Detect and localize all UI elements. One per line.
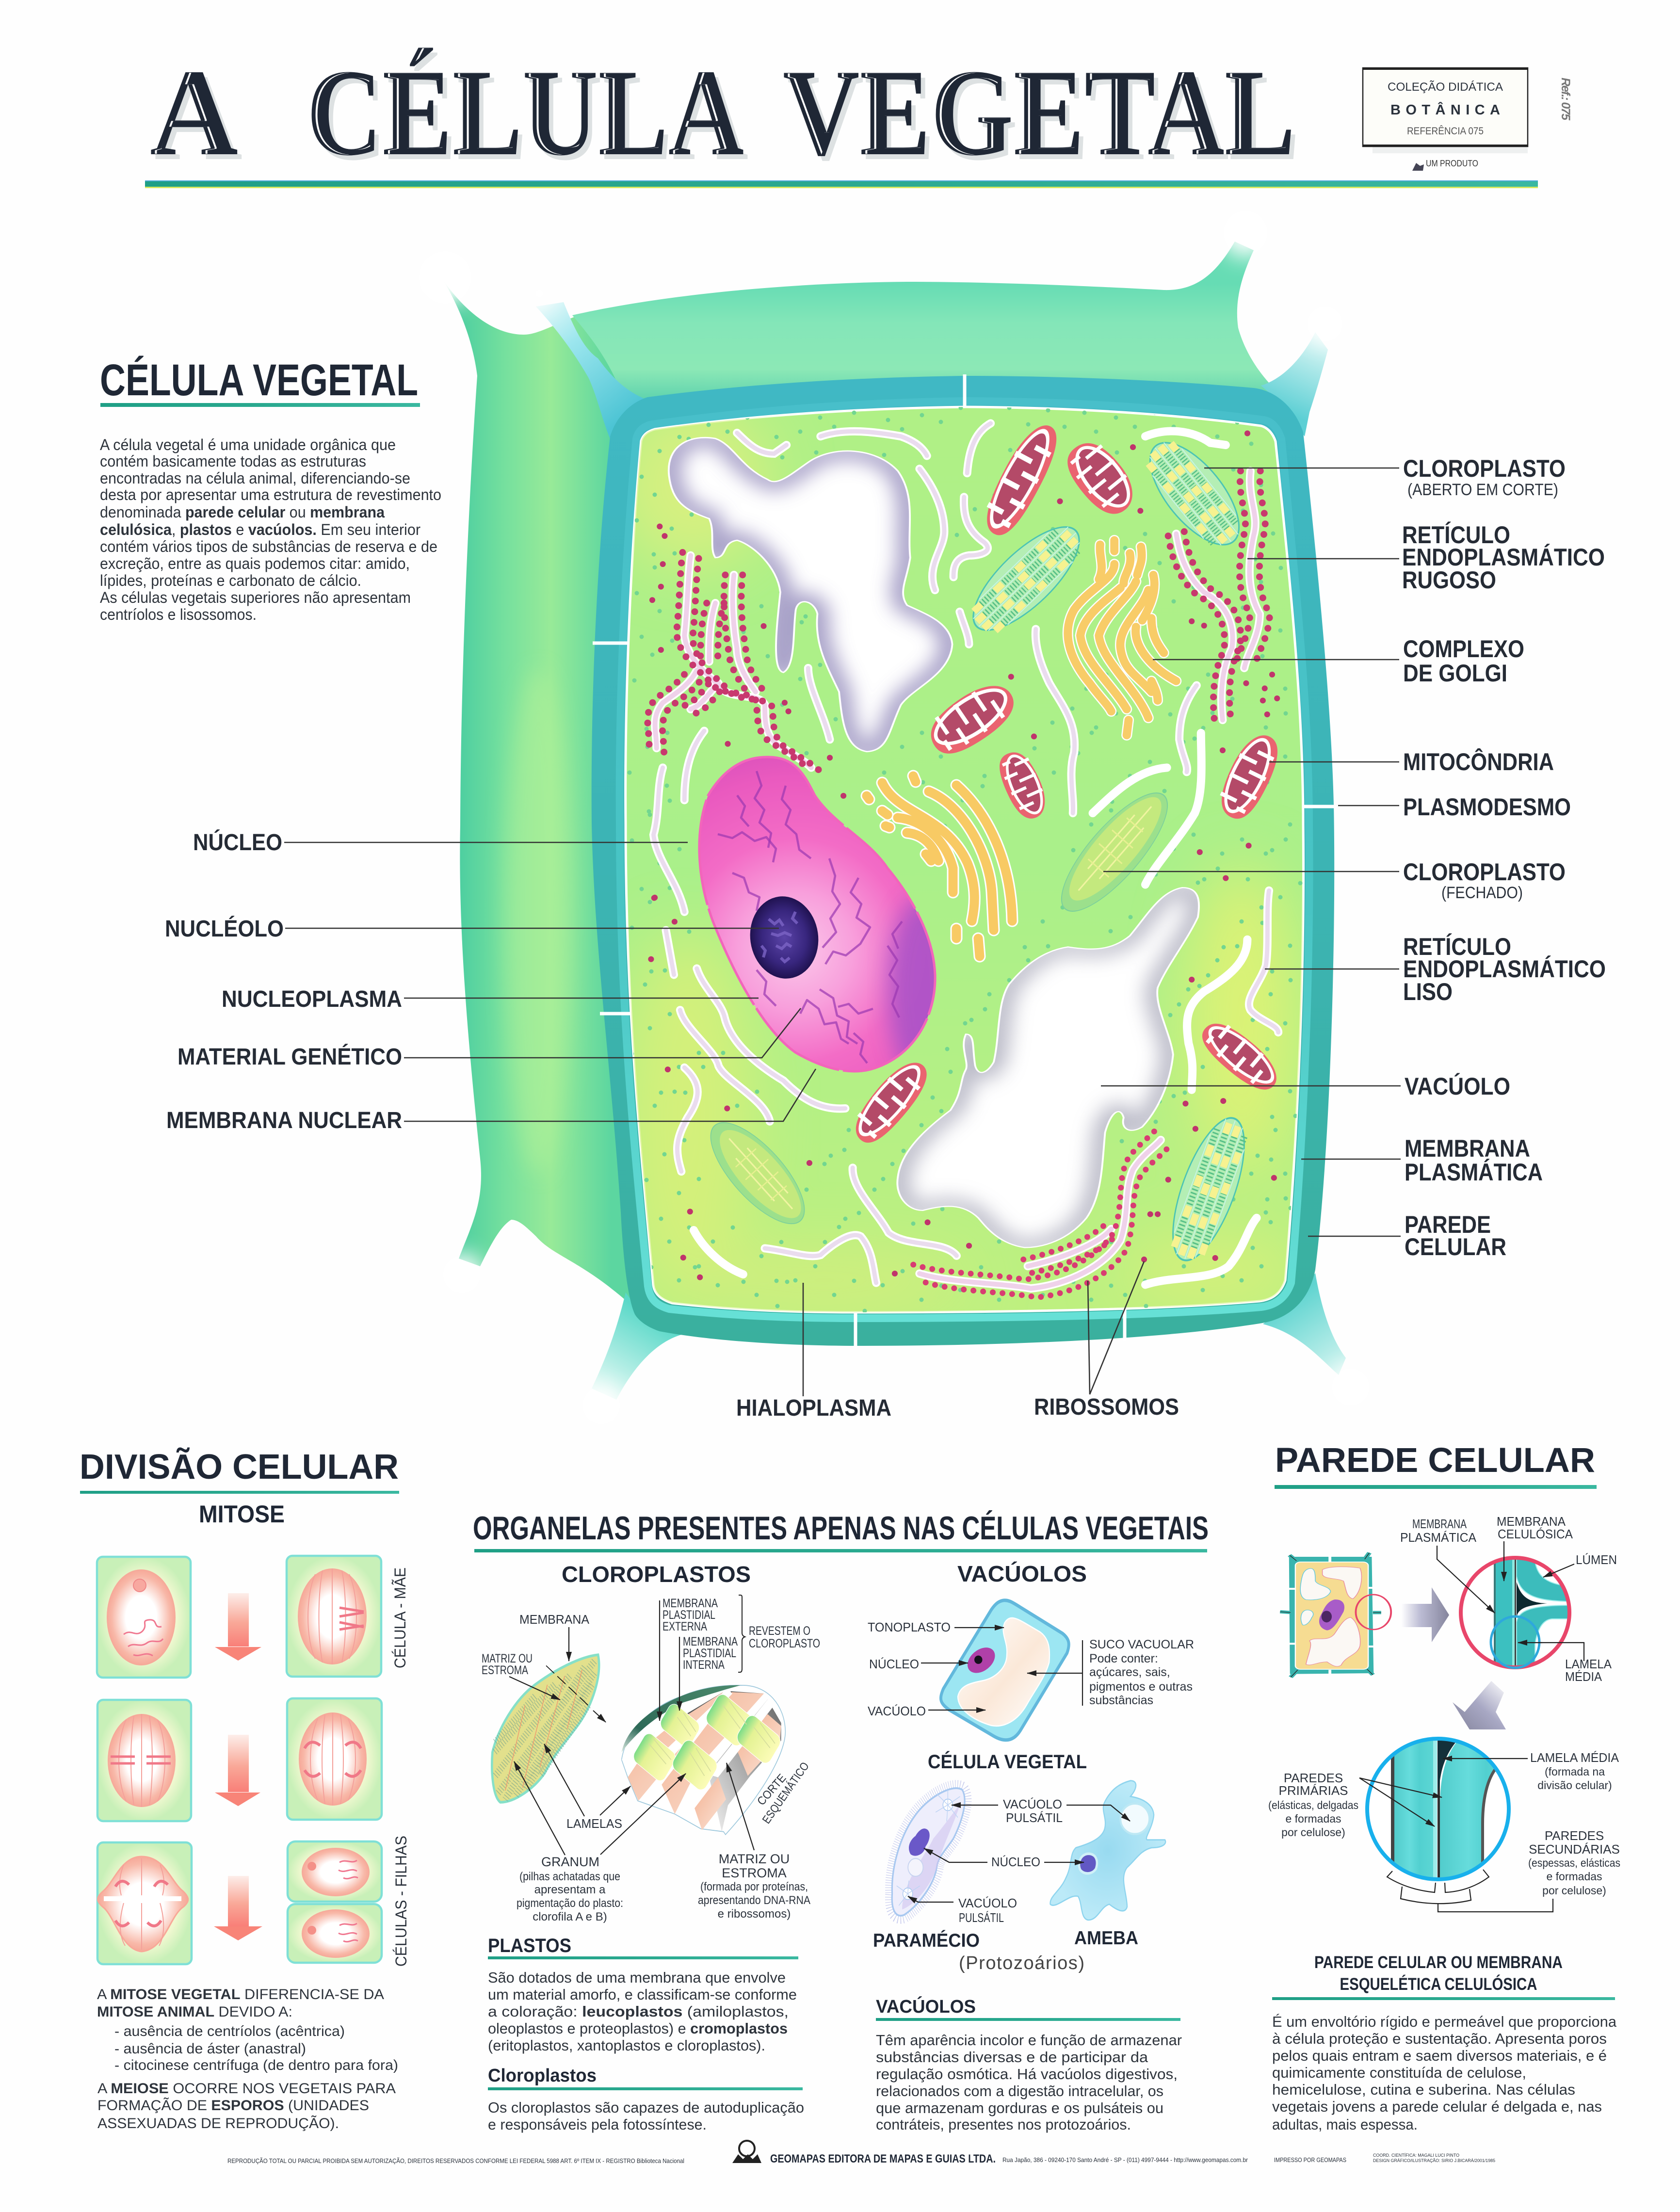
- panel: organelles exclusive to plant cells: [473, 1510, 1209, 2133]
- wall definition heading: [1272, 1953, 1615, 2000]
- corner rib, upper right: [1261, 332, 1328, 436]
- publisher name: GEOMAPAS EDITORA DE MAPAS E GUIAS LTDA.: [770, 2152, 996, 2165]
- right labels: [1402, 455, 1606, 1260]
- chloroplast arrows: [509, 1600, 754, 1855]
- section: plastids: um material amorfo, e classificam-se conforme: [488, 1986, 797, 2003]
- chloroplast labels: MEMBRANA: [519, 1612, 590, 1627]
- Golgi complex, upper: [1068, 540, 1176, 735]
- smooth endoplasmic reticulum, lower strands: [666, 890, 1278, 1285]
- bottom labels: [736, 1394, 1179, 1421]
- body text: encontradas na célula animal, diferenciando-se: [100, 469, 410, 487]
- product note: [1412, 159, 1478, 171]
- icon: geomapas mini logo: [1412, 163, 1424, 171]
- chloroplast labels: [482, 1597, 820, 1923]
- chloroplast labels: GRANUM: [541, 1855, 599, 1869]
- vacuole labels: Pode conter:: [1089, 1652, 1158, 1665]
- labels: wall detail: MÉDIA: [1565, 1669, 1602, 1684]
- daughter cell, top: [288, 1841, 382, 1902]
- right labels: ENDOPLASMÁTICO: [1402, 544, 1605, 571]
- title: A: [150, 44, 238, 181]
- vacuole labels: substâncias: [1089, 1694, 1153, 1707]
- soft fade at wall tips: [417, 209, 1372, 1427]
- vacuole, upper: [669, 437, 953, 752]
- protozoa labels: PULSÁTIL: [959, 1910, 1004, 1925]
- chloroplast labels: MEMBRANA: [662, 1597, 718, 1610]
- daughter cell, bottom: [288, 1904, 382, 1963]
- chloroplast labels: INTERNA: [683, 1658, 725, 1672]
- product note: UM PRODUTO: [1426, 159, 1478, 168]
- section: plastids: São dotados de uma membrana que envolve: [488, 1969, 786, 1986]
- right labels: (FECHADO): [1441, 884, 1523, 902]
- chloroplast labels: MATRIZ OU: [719, 1852, 790, 1866]
- title: [150, 44, 1295, 181]
- body text: celulósica, plastos e vacúolos. Em seu interior: [100, 521, 420, 538]
- right labels: DE GOLGI: [1403, 660, 1507, 687]
- arrow: stage 3: [214, 1876, 262, 1940]
- chloroplast labels: e ribossomos): [718, 1907, 791, 1921]
- labels: wall detail: PLASMÁTICA: [1400, 1530, 1477, 1545]
- panel: cell wall: [1268, 1441, 1620, 2133]
- side label: mother cell: CÉLULA - MÃE: [391, 1567, 409, 1668]
- mitosis text: MITOSE ANIMAL DEVIDO A:: [97, 2004, 292, 2020]
- collection label box: [1363, 67, 1528, 153]
- subheading: vacuoles: VACÚOLOS: [957, 1561, 1087, 1586]
- amoeba illustration: [1050, 1781, 1165, 1920]
- subheading: MITOSE: [199, 1501, 285, 1528]
- chloroplast labels: REVESTEM O: [749, 1624, 810, 1638]
- body text: contém vários tipos de substâncias de reserva e de: [100, 538, 437, 555]
- panel: introduction text: [100, 355, 441, 623]
- smooth endoplasmic reticulum, upper strands: [653, 423, 1226, 912]
- left labels: [165, 829, 402, 1133]
- protozoa labels: VACÚOLO: [1003, 1797, 1062, 1811]
- mitosis stage: prophase: [97, 1557, 191, 1678]
- material genetico: [718, 771, 902, 1063]
- side label: daughter cells: CÉLULAS - FILHAS: [392, 1836, 410, 1967]
- right labels: CLOROPLASTO: [1403, 858, 1566, 886]
- nucleus shading, lower right: [888, 897, 955, 1082]
- corner rib, lower left: [592, 1292, 681, 1400]
- chloroplast labels: ESTROMA: [482, 1663, 528, 1677]
- section: vacuoles text: relacionados com a digestão intracelular, os: [876, 2083, 1163, 2099]
- right labels: RETÍCULO: [1402, 521, 1510, 549]
- section: plastids: PLASTOS: [488, 1935, 571, 1956]
- protozoa labels: (Protozoários): [959, 1953, 1084, 1973]
- labels: wall detail: LÚMEN: [1576, 1552, 1617, 1567]
- hyaloplasm granules: [627, 408, 1310, 1325]
- section: plastids: (eritoplastos, xantoplastos e cloroplastos).: [488, 2037, 765, 2054]
- subheading: plant cell: CÉLULA VEGETAL: [928, 1751, 1087, 1773]
- section: chloroplasts text: e responsáveis pela fotossíntese.: [488, 2116, 707, 2133]
- protozoa labels: PULSÁTIL: [1006, 1810, 1063, 1825]
- heading: PAREDE CELULAR: [1275, 1441, 1595, 1480]
- publisher address: Rua Japão, 386 - 09240-170 Santo André - SP - (011) 4997-9444 - http://www.geomapas.com.br: [1002, 2156, 1248, 2164]
- mitosis text: A MITOSE VEGETAL DIFERENCIA-SE DA: [97, 1986, 384, 2002]
- chloroplasts, open section: [958, 428, 1259, 1269]
- credits: [1373, 2153, 1495, 2163]
- nucleus: [699, 757, 955, 1082]
- nucleolus: [745, 892, 824, 983]
- chloroplast whole illustration: [492, 1655, 599, 1802]
- title rule: [145, 180, 1538, 188]
- right labels: ENDOPLASMÁTICO: [1403, 955, 1606, 983]
- mitosis text: ASSEXUADAS DE REPRODUÇÃO).: [97, 2115, 339, 2131]
- chloroplast labels: PLASTIDIAL: [662, 1608, 715, 1622]
- right labels: PAREDE: [1405, 1211, 1491, 1238]
- chloroplast labels: MATRIZ OU: [482, 1652, 533, 1665]
- leader lines: [284, 468, 1401, 1396]
- right labels: PLASMODESMO: [1403, 793, 1571, 821]
- label line 1: COLEÇÃO DIDÁTICA: [1388, 81, 1503, 94]
- magnified detail: blue circle: [1363, 1736, 1518, 1882]
- wall definition text: [1272, 2013, 1617, 2133]
- heading: CÉLULA VEGETAL: [100, 355, 418, 405]
- chloroplast labels: (pilhas achatadas que: [519, 1870, 620, 1883]
- subheading: chloroplasts: CLOROPLASTOS: [562, 1562, 751, 1587]
- Golgi complex, lower: [867, 776, 1012, 956]
- chloroplast section illustration: [622, 1685, 785, 1835]
- mitosis text: [97, 1986, 398, 2131]
- section: plastids: [488, 1935, 798, 2054]
- bottom labels: RIBOSSOMOS: [1034, 1394, 1179, 1420]
- labels: wall detail: e formadas: [1285, 1812, 1341, 1825]
- section: vacuoles text: contráteis, presentes nos protozoários.: [876, 2116, 1131, 2133]
- labels: wall detail: LAMELA: [1565, 1657, 1612, 1671]
- small cell illustration: [1280, 1553, 1391, 1677]
- section: chloroplasts text: [488, 2066, 804, 2133]
- section: vacuoles text: regulação osmótica. Há vacúolos digestivos,: [876, 2066, 1178, 2083]
- chloroplast labels: CORTE: [755, 1772, 789, 1808]
- chloroplast labels: PLASTIDIAL: [683, 1647, 736, 1660]
- mitosis text: - citocinese centrífuga (de dentro para fora): [114, 2057, 398, 2073]
- labels: wall detail: (elásticas, delgadas: [1268, 1799, 1358, 1811]
- protozoa labels: NÚCLEO: [991, 1855, 1040, 1869]
- heading: ORGANELAS PRESENTES APENAS NAS CÉLULAS VEGETAIS: [473, 1510, 1209, 1547]
- corner rib, lower right: [1263, 1273, 1346, 1375]
- right labels: LISO: [1403, 978, 1453, 1005]
- body text: [100, 436, 441, 623]
- labels: wall detail: por celulose): [1281, 1826, 1345, 1839]
- wall definition text: à célula proteção e sustentação. Apresenta poros: [1272, 2030, 1607, 2047]
- mitochondria: [846, 417, 1287, 1151]
- left labels: MEMBRANA NUCLEAR: [166, 1108, 402, 1133]
- chloroplast labels: EXTERNA: [662, 1620, 707, 1633]
- arrow: stage 1: [215, 1593, 261, 1661]
- body text: desta por apresentar uma estrutura de revestimento: [100, 486, 441, 503]
- left labels: MATERIAL GENÉTICO: [178, 1044, 402, 1070]
- section: vacuoles text: [876, 1996, 1182, 2133]
- protozoa arrows: [908, 1805, 1130, 1902]
- arrow: zoom down: [1453, 1681, 1506, 1729]
- paramecium illustration: [892, 1788, 965, 1916]
- left labels: NUCLEOPLASMA: [222, 986, 402, 1012]
- chloroplast labels: clorofila A e B): [533, 1910, 607, 1923]
- wall definition text: hemicelulose, cutina e suberina. Nas células: [1272, 2081, 1575, 2098]
- vacuole labels: pigmentos e outras: [1089, 1680, 1193, 1694]
- arrow: stage 2: [215, 1735, 260, 1806]
- wall definition text: quimicamente constituída de celulose,: [1272, 2064, 1526, 2081]
- mitosis text: FORMAÇÃO DE ESPOROS (UNIDADES: [97, 2097, 369, 2114]
- mitosis stage: telophase: [97, 1842, 192, 1964]
- vacuole labels: [868, 1620, 1194, 1718]
- chloroplast labels: LAMELAS: [566, 1816, 622, 1831]
- section: chloroplasts text: Os cloroplastos são capazes de autoduplicação: [488, 2099, 804, 2116]
- protozoa labels: [873, 1797, 1138, 1973]
- labels: wall detail: MEMBRANA: [1497, 1514, 1566, 1529]
- arrow: zoom right: [1401, 1587, 1449, 1642]
- mitosis stage: anaphase: [287, 1698, 382, 1820]
- mitosis text: - ausência de centríolos (acêntrica): [114, 2023, 345, 2039]
- mitosis stage: metaphase start: [287, 1556, 381, 1677]
- legal note: REPRODUÇÃO TOTAL OU PARCIAL PROIBIDA SEM AUTORIZAÇÃO, DIREITOS RESERVADOS CONFORME LEI FEDERAL 5988 ART. 6º ITEM IX - REGISTRO Biblioteca Nacional: [227, 2157, 684, 2164]
- main diagram: plant cell: [284, 209, 1401, 1427]
- chloroplast labels: ESTROMA: [722, 1866, 787, 1880]
- ribosomes: [652, 433, 1277, 898]
- reference code: Ref.: 075: [1559, 78, 1572, 121]
- vacuole, lower: [897, 888, 1199, 1247]
- labels: wall detail: divisão celular): [1537, 1779, 1612, 1792]
- chloroplast labels: MEMBRANA: [683, 1635, 738, 1648]
- wall definition heading: ESQUELÉTICA CELULÓSICA: [1340, 1974, 1537, 1994]
- credits: DESIGN GRÁFICO/ILUSTRAÇÃO: SIRIO J.BICARÁ/2001/1985: [1373, 2158, 1495, 2163]
- labels: wall detail: por celulose): [1542, 1884, 1606, 1897]
- labels: wall detail: [1268, 1514, 1620, 1897]
- protozoa labels: PARAMÉCIO: [873, 1930, 980, 1951]
- brace: [738, 1595, 745, 1672]
- mitosis text: - ausência de áster (anastral): [114, 2041, 306, 2057]
- labels: wall detail: (formada na: [1545, 1765, 1605, 1778]
- plasmodesmata gaps: [593, 374, 1337, 1348]
- body text: contém basicamente todas as estruturas: [100, 452, 366, 470]
- label line 3: REFERÊNCIA 075: [1407, 126, 1484, 137]
- wall definition text: pelos quais entram e saem diversos materiais, e é: [1272, 2047, 1607, 2064]
- light patch on left wall: [504, 669, 572, 1174]
- right labels: PLASMÁTICA: [1405, 1159, 1543, 1186]
- cell wall: [592, 376, 1334, 1346]
- wall definition text: vegetais jovens a parede celular é delgada e, nas: [1272, 2098, 1602, 2115]
- protozoa labels: VACÚOLO: [958, 1896, 1017, 1910]
- ribosomes, lower: [651, 898, 1274, 1277]
- left labels: NUCLÉOLO: [165, 916, 284, 942]
- right labels: MEMBRANA: [1405, 1135, 1530, 1162]
- label line 2: BOTÂNICA: [1390, 101, 1500, 118]
- right labels: COMPLEXO: [1403, 635, 1524, 662]
- section: vacuoles text: que armazenam gorduras e os pulsáteis ou: [876, 2099, 1163, 2116]
- section: vacuoles text: VACÚOLOS: [876, 1996, 976, 2017]
- right labels: RUGOSO: [1402, 566, 1496, 594]
- bottom labels: HIALOPLASMA: [736, 1395, 891, 1421]
- neighbouring cell wall, top: [572, 242, 1300, 417]
- body text: As células vegetais superiores não apresentam: [100, 589, 411, 606]
- inner wall highlight: [620, 401, 1309, 1318]
- body text: denominada parede celular ou membrana: [100, 503, 385, 521]
- vacuole cell illustration: [941, 1600, 1069, 1740]
- magnified detail: red circle: [1461, 1552, 1569, 1673]
- mitosis text: A MEIOSE OCORRE NOS VEGETAIS PARA: [97, 2081, 396, 2097]
- section: plastids: oleoplastos e proteoplastos) e cromoplastos: [488, 2020, 788, 2037]
- protozoa labels: AMEBA: [1074, 1928, 1138, 1949]
- chloroplast labels: apresentando DNA-RNA: [698, 1894, 810, 1907]
- chloroplast labels: CLOROPLASTO: [749, 1637, 820, 1650]
- rough endoplasmic reticulum, lower: [913, 1131, 1167, 1297]
- wall definition text: É um envoltório rígido e permeável que proporciona: [1272, 2013, 1617, 2030]
- vacuole labels: TONOPLASTO: [868, 1620, 951, 1634]
- credits: COORD. CIENTÍFICA: MAGALI LUCI PINTO: [1373, 2153, 1459, 2158]
- wall detail arrows and brackets: [1359, 1541, 1584, 1912]
- labels: wall detail: LAMELA MÉDIA: [1530, 1750, 1619, 1765]
- mitosis stage: metaphase: [97, 1700, 191, 1821]
- right labels: VACÚOLO: [1405, 1073, 1510, 1100]
- icon: publisher logo: [732, 2141, 761, 2163]
- labels: wall detail: PAREDES: [1545, 1828, 1604, 1843]
- chloroplast labels: ESQUEMÁTICO: [760, 1760, 812, 1826]
- vacuole labels: SUCO VACUOLAR: [1089, 1638, 1194, 1651]
- body text: centríolos e lisossomos.: [100, 606, 257, 623]
- panel: cell division: [80, 1447, 410, 2131]
- neighbouring cell wall, left and bottom: [443, 280, 679, 1305]
- rough endoplasmic reticulum, upper: [647, 471, 1270, 771]
- title: VEGETAL: [783, 44, 1295, 181]
- labels: wall detail: PAREDES: [1284, 1771, 1343, 1785]
- right labels: (ABERTO EM CORTE): [1407, 481, 1558, 499]
- section: vacuoles text: substâncias diversas e de participar da: [876, 2049, 1148, 2066]
- labels: wall detail: (espessas, elásticas: [1528, 1857, 1620, 1869]
- title: CÉLULA: [307, 44, 744, 181]
- left labels: NÚCLEO: [193, 829, 282, 856]
- printer: IMPRESSO POR GEOMAPAS: [1274, 2156, 1346, 2164]
- labels: wall detail: PRIMÁRIAS: [1278, 1783, 1348, 1798]
- footer: [227, 2141, 1495, 2165]
- vacuole arrows: [921, 1628, 1082, 1710]
- labels: wall detail: e formadas: [1546, 1870, 1602, 1883]
- corner rib, upper left: [536, 302, 647, 439]
- right labels: CLOROPLASTO: [1403, 455, 1566, 482]
- right labels: RETÍCULO: [1403, 933, 1511, 960]
- right labels: CELULAR: [1405, 1233, 1506, 1260]
- chloroplasts, closed: [696, 779, 1183, 1238]
- chloroplast labels: (formada por proteínas,: [700, 1880, 808, 1893]
- section: chloroplasts text: Cloroplastos: [488, 2066, 597, 2086]
- body text: A célula vegetal é uma unidade orgânica que: [100, 436, 396, 453]
- chloroplast labels: apresentam a: [534, 1883, 606, 1896]
- vacuole labels: NÚCLEO: [869, 1657, 919, 1671]
- heading: DIVISÃO CELULAR: [80, 1447, 399, 1486]
- section: plastids: a coloração: leucoplastos (amiloplastos,: [488, 2003, 789, 2020]
- wall definition text: adultas, mais espessa.: [1272, 2116, 1418, 2133]
- labels: wall detail: SECUNDÁRIAS: [1529, 1842, 1620, 1857]
- body text: excreção, entre as quais podemos citar: amido,: [100, 555, 410, 572]
- labels: wall detail: CELULÓSICA: [1498, 1527, 1573, 1541]
- cytoplasm: [626, 407, 1304, 1312]
- labels: wall detail: MEMBRANA: [1412, 1517, 1467, 1531]
- wall definition heading: PAREDE CELULAR OU MEMBRANA: [1314, 1953, 1563, 1972]
- right labels: MITOCÔNDRIA: [1403, 748, 1554, 775]
- vacuole labels: açúcares, sais,: [1089, 1665, 1170, 1679]
- cytoplasm shading: [616, 403, 1310, 1325]
- vacuole labels: VACÚOLO: [868, 1704, 926, 1718]
- body text: lípides, proteínas e carbonato de cálcio.: [100, 572, 361, 589]
- section: vacuoles text: Têm aparência incolor e função de armazenar: [876, 2032, 1182, 2049]
- chloroplast labels: pigmentação do plasto:: [517, 1897, 623, 1910]
